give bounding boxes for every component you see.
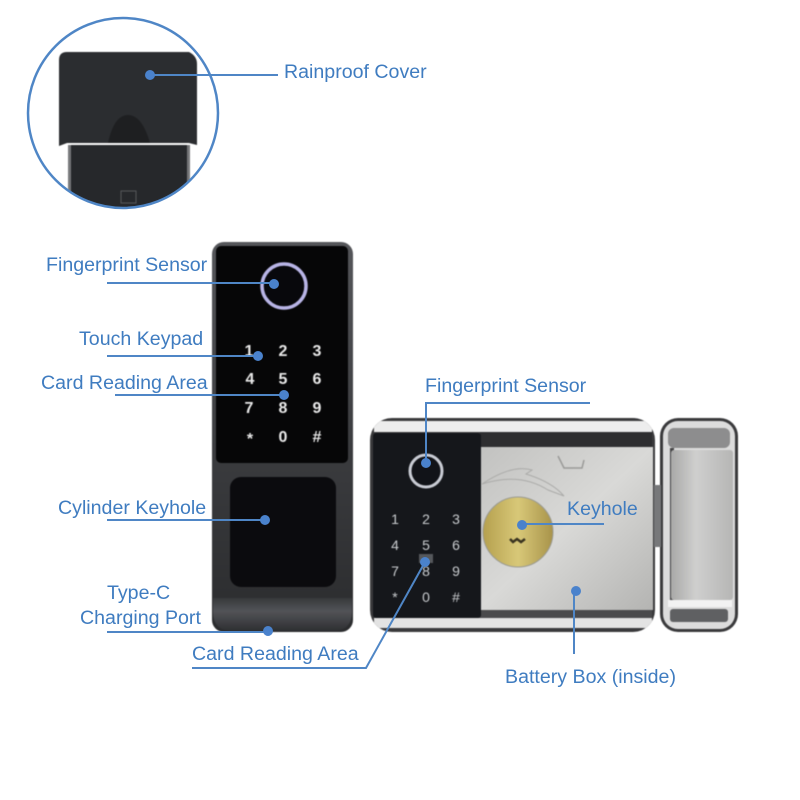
callout: fingerprint sensor (vertical lock): Fingerprint Sensor: [46, 254, 208, 276]
panel: rainproof cover inset: [28, 18, 427, 225]
callout: battery box: Battery Box (inside): [505, 666, 676, 688]
label: card reading area (bottom): Card Reading Area: [192, 643, 359, 665]
keypad digits: 7: [245, 400, 254, 417]
callout: cylinder keyhole: [58, 497, 270, 525]
keypad digits: 0: [279, 429, 288, 446]
brass cylinder: [483, 497, 553, 567]
bottom cap: [213, 598, 352, 631]
keypad digits: 8: [279, 400, 288, 417]
steel plate: [478, 447, 653, 610]
keypad digits: 4: [246, 371, 255, 388]
callout: fingerprint sensor (vertical lock): [46, 254, 279, 289]
keypad digits: 8: [422, 563, 430, 579]
callout: cylinder keyhole: Cylinder Keyhole: [58, 497, 206, 519]
keypad digits: *: [392, 589, 398, 605]
fingerprint ring: [410, 455, 442, 487]
callout: card reading area (vertical lock): Card Reading Area: [41, 372, 208, 394]
keypad digits: [391, 511, 460, 605]
keypad digits: 5: [279, 371, 288, 388]
keypad digits: 3: [313, 343, 322, 360]
keypad digits: 7: [391, 563, 399, 579]
direction arrow engraving: [482, 469, 564, 496]
keypad digits: 4: [391, 537, 399, 553]
keypad digits: [245, 343, 322, 448]
callout: touch keypad: Touch Keypad: [79, 328, 203, 350]
card reader mark: [419, 554, 433, 563]
keypad digits: *: [247, 431, 254, 448]
callout: type-c charging port: [80, 582, 273, 636]
cover device photo: [59, 52, 197, 225]
keypad digits: 2: [422, 511, 430, 527]
panel: vertical smart lock: [212, 242, 353, 632]
keypad digits: 0: [422, 589, 430, 605]
keypad digits: 2: [279, 343, 288, 360]
callout: type-c charging port: Type-C: [107, 582, 170, 604]
inset circle outline: [28, 18, 218, 208]
strike box: [654, 418, 738, 632]
keypad digits: #: [452, 589, 460, 605]
keypad digits: 6: [313, 371, 322, 388]
keypad panel: [373, 433, 481, 618]
callout: keyhole: [517, 498, 638, 530]
fingerprint ring: [262, 264, 306, 308]
keypad digits: 3: [452, 511, 460, 527]
callout line: card reading area to rim lock: [192, 557, 430, 668]
keypad digits: 9: [313, 400, 322, 417]
callout: fingerprint sensor (rim lock): [421, 375, 590, 468]
callout: touch keypad: [79, 328, 263, 361]
panel: rim lock: [370, 418, 738, 632]
label: Rainproof Cover: Rainproof Cover: [284, 61, 427, 83]
lock housing: [370, 418, 655, 632]
keypad digits: 1: [245, 343, 254, 360]
keypad digits: 1: [391, 511, 399, 527]
key slot: [510, 539, 525, 542]
callout: card reading area (vertical lock): [41, 372, 289, 400]
lock body: [212, 242, 353, 632]
callout: keyhole: Keyhole: [567, 498, 638, 520]
keypad digits: 5: [422, 537, 430, 553]
keypad digits: #: [313, 429, 322, 446]
callout: battery box: [505, 586, 676, 688]
black front panel: [216, 246, 348, 463]
cylinder keyhole cover: [230, 477, 336, 587]
keypad digits: 9: [452, 563, 460, 579]
keypad digits: 6: [452, 537, 460, 553]
callout: type-c charging port: Charging Port: [80, 607, 201, 629]
callout line and dot: [145, 70, 278, 80]
callout: fingerprint sensor (rim lock): Fingerprint Sensor: [425, 375, 587, 397]
top slot engraving: [558, 456, 584, 468]
